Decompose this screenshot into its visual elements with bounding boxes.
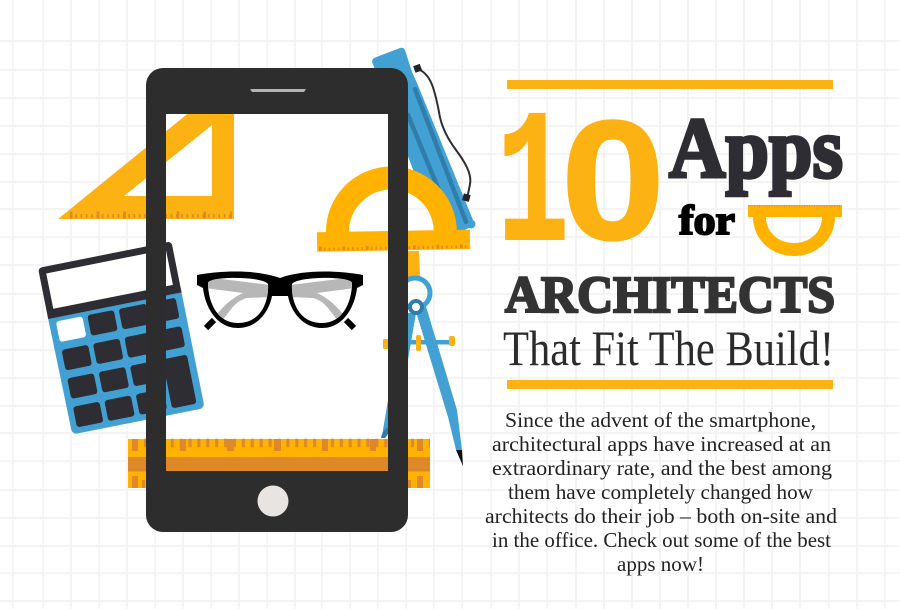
word for: for — [679, 197, 735, 243]
word Apps: Apps — [669, 100, 843, 196]
phone frame — [146, 68, 408, 532]
icon: compass — [381, 251, 463, 466]
icon: drawing tube with strap — [372, 48, 475, 240]
subtitle: That Fit The Build! — [503, 320, 834, 376]
intro paragraph: apps now! — [617, 552, 704, 576]
intro paragraph: in the office. Check out some of the best — [492, 528, 831, 552]
calculator keys — [56, 298, 197, 427]
icon: ruler — [128, 439, 430, 488]
phone home button — [258, 486, 288, 516]
number 10: 0 — [561, 86, 665, 276]
top divider bar — [507, 80, 833, 89]
number 10 — [497, 82, 665, 297]
intro paragraph: extraordinary rate, and the best among — [492, 456, 833, 480]
bottom divider bar — [507, 380, 833, 389]
title — [497, 80, 843, 389]
icon: set square triangle — [58, 76, 234, 219]
number 10: 1 — [497, 82, 569, 297]
icon: protractor — [316, 165, 470, 252]
intro paragraph: architectural apps have increased at an — [492, 432, 832, 456]
icon: glasses — [197, 272, 363, 328]
intro paragraph: them have completely changed how — [508, 480, 814, 504]
intro paragraph — [485, 408, 838, 576]
icon: inverted protractor — [748, 205, 842, 256]
phone speaker — [250, 89, 306, 92]
word ARCHITECTS: ARCHITECTS — [505, 267, 835, 324]
intro paragraph: Since the advent of the smartphone, — [505, 408, 816, 432]
intro paragraph: architects do their job – both on-site and — [485, 504, 838, 528]
icon: calculator — [38, 241, 205, 435]
